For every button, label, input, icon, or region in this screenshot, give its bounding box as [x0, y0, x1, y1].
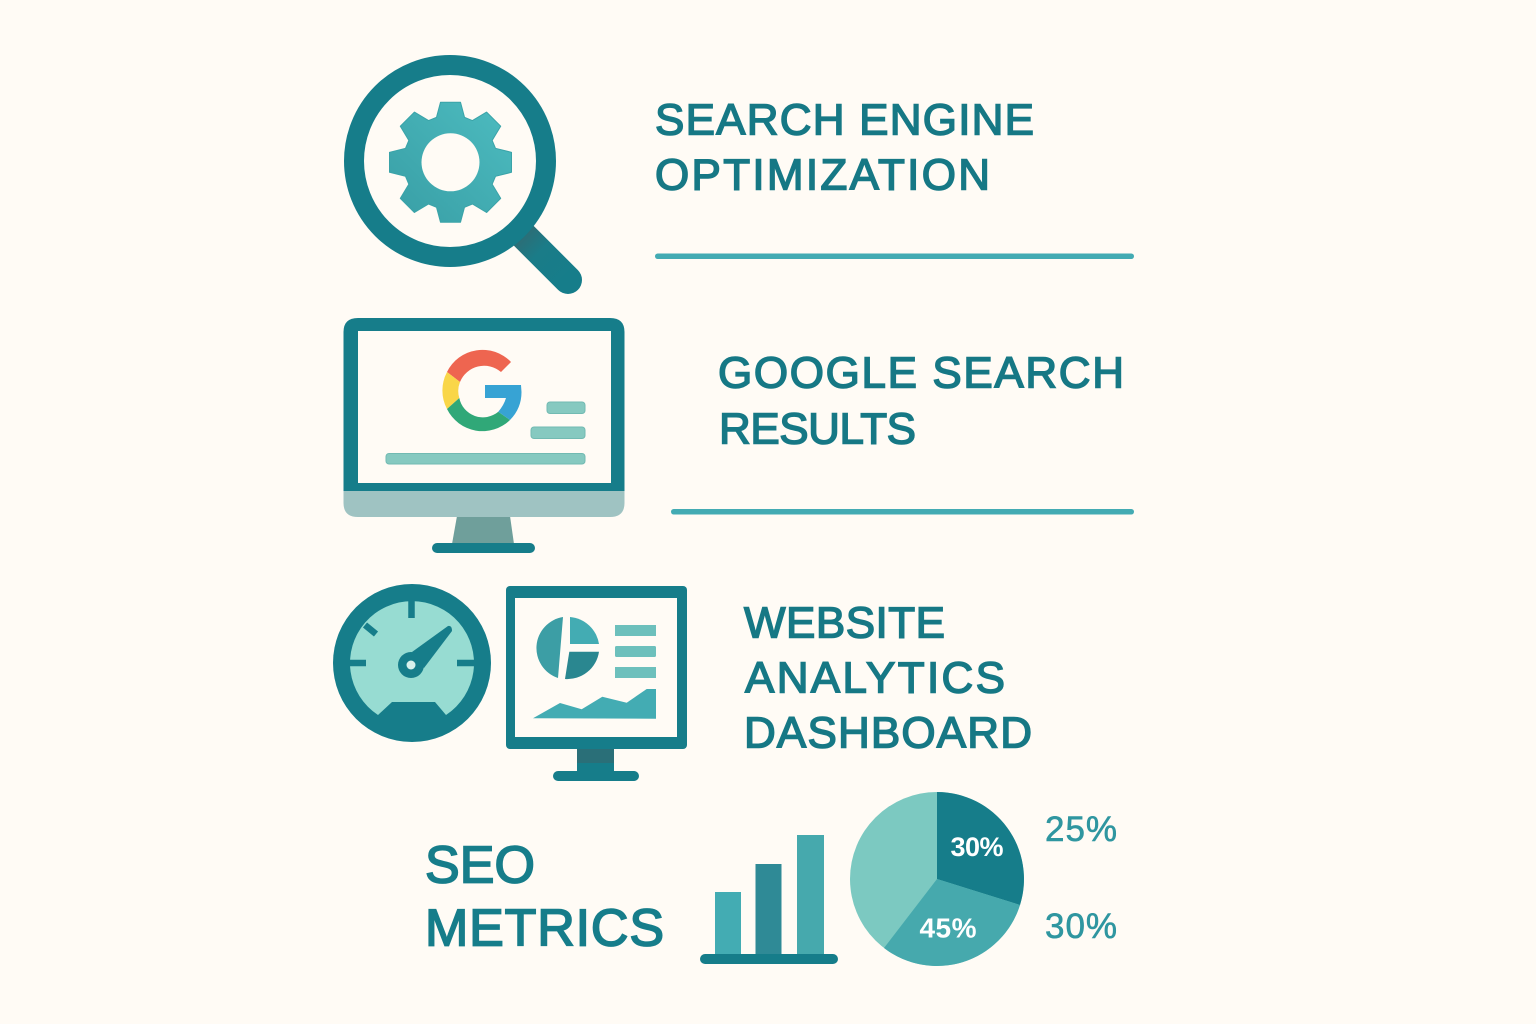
gauge needle: [412, 626, 452, 668]
heading: search engine optimization: [655, 96, 1034, 200]
dashboard legend bars: [615, 625, 656, 678]
monitor frame: [344, 318, 624, 491]
gauge rim: [333, 584, 491, 742]
heading: website analytics dashboard: WEBSITE: [744, 598, 945, 648]
search result bars: [386, 402, 585, 464]
pie slice: 30%: [937, 792, 1024, 905]
magnifier handle: [523, 235, 568, 280]
pie label: 45%: 45%: [920, 912, 977, 944]
dashboard pie chart: [536, 617, 599, 679]
icon: google G: [442, 350, 522, 431]
pie label: 30%: 30%: [950, 832, 1004, 862]
heading: google search results: GOOGLE SEARCH: [718, 348, 1124, 398]
heading: seo metrics: SEO: [425, 836, 535, 894]
dashboard base: [553, 771, 639, 781]
pie chart: [850, 792, 1024, 966]
monitor chin: [344, 491, 624, 517]
dashboard stand: [577, 748, 614, 763]
icon: speedometer gauge: [333, 584, 491, 742]
icon: magnifying glass with gear: [354, 65, 568, 280]
heading: seo metrics: [425, 836, 664, 958]
monitor base: [432, 543, 535, 553]
monitor stand: [452, 516, 514, 544]
metric label: 30%: 30%: [1045, 907, 1117, 946]
divider line 1: [655, 254, 1134, 259]
heading: website analytics dashboard: ANALYTICS: [745, 654, 1005, 702]
heading: website analytics dashboard: [744, 598, 1032, 758]
bar chart baseline: [700, 954, 838, 964]
heading: google search results: RESULTS: [719, 404, 916, 454]
gauge face: [350, 601, 474, 715]
heading: search engine optimization: SEARCH ENGINE: [655, 96, 1034, 144]
dashboard frame: [506, 586, 687, 749]
icon: desktop monitor with google search: [344, 318, 624, 553]
pie slice: 45%: [884, 879, 1020, 966]
heading: search engine optimization: OPTIMIZATION: [655, 150, 990, 200]
dashboard area chart: [533, 689, 656, 719]
bar chart: [700, 835, 838, 964]
heading: seo metrics: METRICS: [425, 900, 664, 958]
divider line 2: [671, 509, 1134, 514]
metric label: 25%: 25%: [1045, 810, 1117, 849]
gear: [390, 102, 512, 222]
heading: google search results: [718, 348, 1124, 454]
heading: website analytics dashboard: DASHBOARD: [744, 708, 1032, 758]
icon: analytics dashboard monitor: [506, 586, 687, 781]
magnifier ring: [354, 65, 546, 257]
gauge ticks: [350, 601, 474, 663]
monitor screen: [358, 331, 611, 483]
dashboard screen: [515, 598, 677, 737]
